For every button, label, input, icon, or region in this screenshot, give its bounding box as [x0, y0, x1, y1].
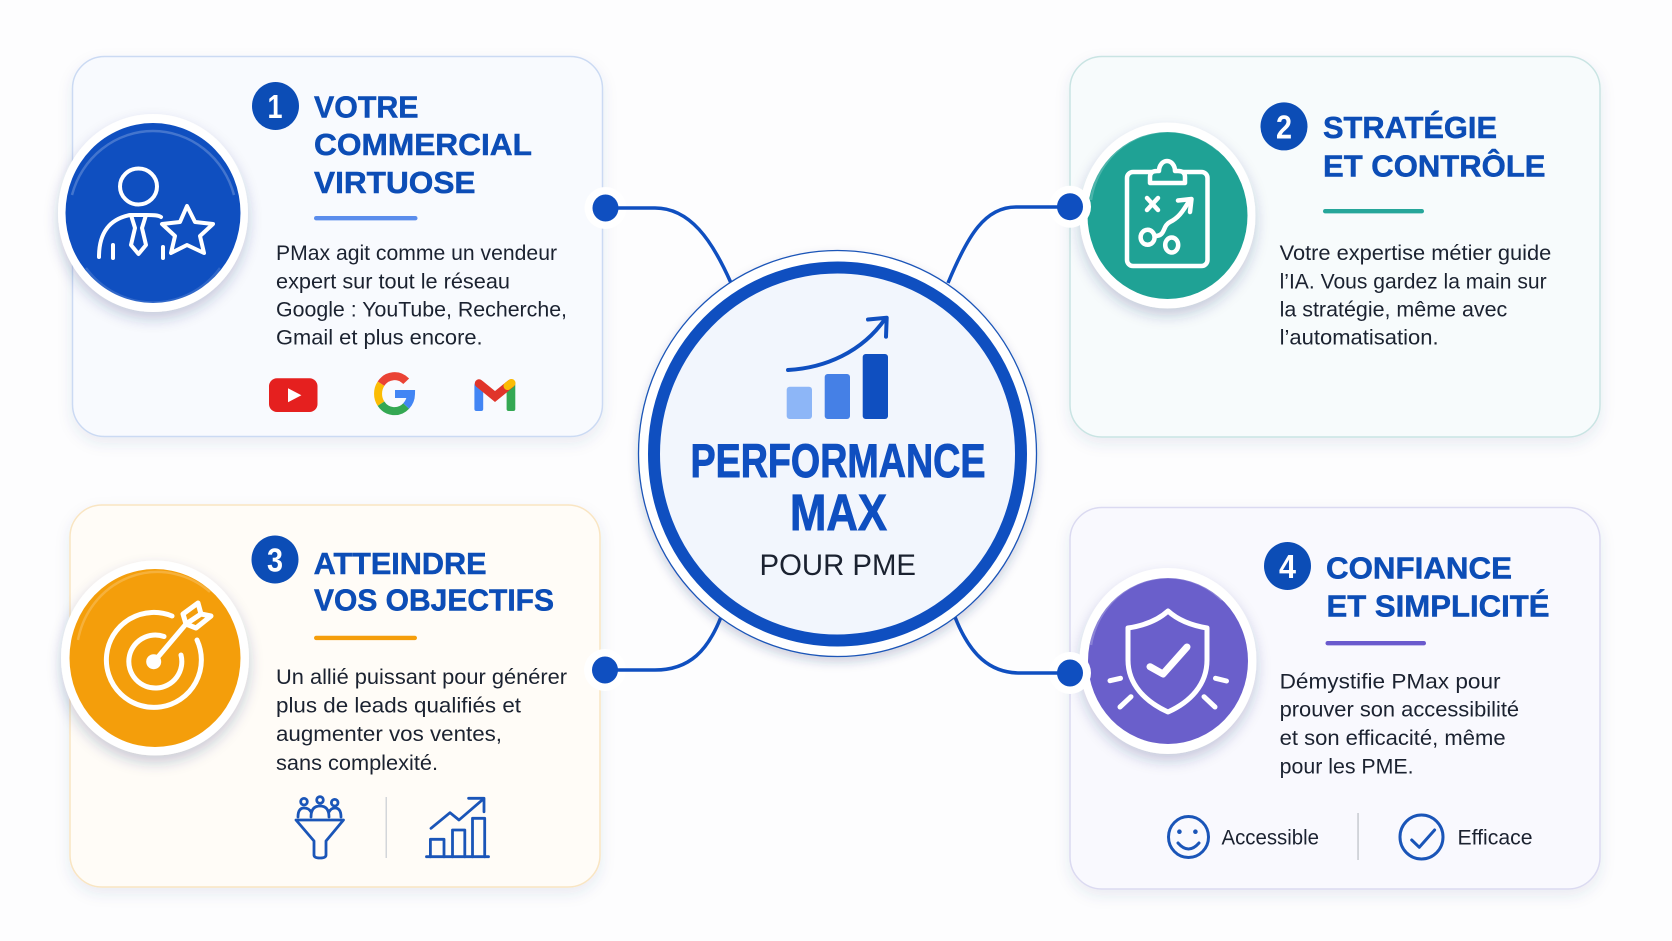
icon: YouTube	[269, 378, 318, 412]
heading: STRATÉGIE	[1323, 110, 1497, 145]
card background	[1070, 508, 1600, 889]
body text: Google : YouTube, Recherche,	[276, 298, 567, 321]
heading: ET CONTRÔLE	[1323, 148, 1546, 184]
icon: target with arrow	[61, 560, 249, 756]
body text: expert sur tout le réseau	[276, 270, 510, 293]
heading	[1326, 550, 1550, 623]
panel: 2 stratégie et contrôle	[1070, 56, 1600, 437]
heading underline	[1323, 209, 1424, 213]
label: accessible: Accessible	[1222, 826, 1319, 849]
body text: augmenter vos ventes,	[276, 723, 502, 746]
body text: l’IA. Vous gardez la main sur	[1280, 270, 1547, 293]
heading: ATTEINDRE	[314, 546, 487, 581]
card background	[1070, 56, 1600, 437]
heading underline	[314, 636, 417, 640]
heading: VIRTUOSE	[314, 165, 476, 200]
heading: ET SIMPLICITÉ	[1326, 588, 1550, 623]
body text: sans complexité.	[276, 752, 438, 775]
panel: 3 atteindre vos objectifs	[61, 505, 600, 887]
number badge 2: 2	[1276, 108, 1292, 146]
body text	[1280, 242, 1551, 350]
heading: VOTRE	[314, 89, 418, 124]
body text: Gmail et plus encore.	[276, 326, 483, 349]
number badge 1: 1	[268, 88, 282, 125]
number badge 3	[252, 536, 298, 584]
heading	[314, 89, 532, 200]
hub rings	[638, 250, 1036, 656]
number badge 2	[1260, 102, 1308, 150]
body text: prouver son accessibilité	[1280, 699, 1519, 722]
body text: Un allié puissant pour générer	[276, 666, 567, 689]
divider	[386, 797, 387, 858]
label: efficace: Efficace	[1458, 826, 1532, 849]
icon: smiley	[1168, 816, 1208, 858]
body text: PMax agit comme un vendeur	[276, 242, 557, 265]
body text: pour les PME.	[1280, 755, 1414, 778]
icon: rising bars and arrow	[787, 318, 888, 419]
heading: COMMERCIAL	[314, 127, 532, 162]
connector: card 3 to center	[584, 617, 721, 691]
central hub: performance max	[638, 250, 1036, 656]
body text: l’automatisation.	[1280, 326, 1439, 350]
icon: Google	[378, 376, 411, 411]
heading underline	[1326, 641, 1426, 645]
icon: shield with check	[1080, 568, 1256, 754]
body text	[276, 666, 567, 775]
icon: lead funnel	[296, 797, 344, 858]
number badge 3: 3	[267, 542, 283, 578]
icon: salesperson with star	[58, 114, 248, 312]
hub subtitle: POUR PME	[760, 549, 916, 582]
heading: CONFIANCE	[1326, 550, 1512, 585]
heading: VOS OBJECTIFS	[314, 583, 554, 618]
panel: 1 votre commercial virtuose	[58, 56, 602, 436]
hub title: MAX	[790, 484, 887, 541]
heading underline	[314, 216, 418, 220]
card background	[70, 505, 600, 887]
heading	[1323, 110, 1546, 184]
icon: check circle	[1400, 815, 1443, 859]
card background	[72, 56, 602, 436]
body text: et son efficacité, même	[1280, 727, 1506, 750]
connector: card 1 to center	[584, 187, 731, 283]
body text	[276, 242, 567, 349]
number badge 4: 4	[1279, 548, 1297, 585]
connector: card 4 to center	[955, 617, 1091, 694]
icon: growth chart	[426, 798, 488, 857]
body text: la stratégie, même avec	[1280, 298, 1507, 321]
icon: clipboard strategy	[1080, 122, 1256, 308]
body text: Votre expertise métier guide	[1280, 242, 1551, 265]
body text	[1280, 671, 1519, 778]
hub title	[690, 434, 986, 541]
number badge 4	[1264, 542, 1311, 590]
divider	[1357, 813, 1359, 860]
number badge 1	[252, 82, 299, 130]
icon: Gmail	[474, 383, 515, 411]
heading	[314, 546, 554, 618]
connector: card 2 to center	[948, 186, 1091, 283]
body text: Démystifie PMax pour	[1280, 671, 1501, 694]
panel: 4 confiance et simplicité	[1070, 508, 1600, 889]
body text: plus de leads qualifiés et	[276, 695, 521, 718]
hub title: PERFORMANCE	[690, 434, 986, 487]
